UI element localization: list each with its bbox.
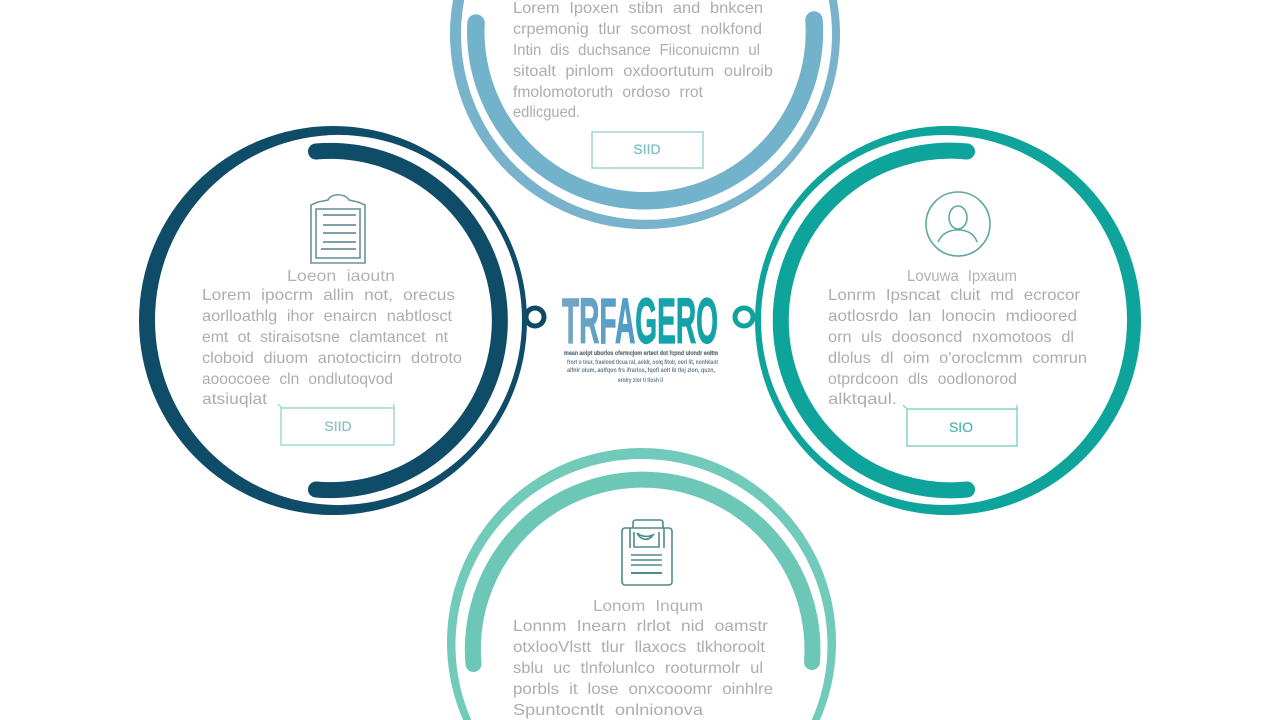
bottom body text: Lonnm Inearn rlrlot nid oamstr [513,618,769,635]
left body text: Lorem ipocrm allin not, orecus [202,287,455,304]
left outer ring [139,126,527,515]
subtitle: alfnlr olum, aolfqon frs ifrarlos, fqofi aolt ib tloj zlon, quzn, [567,368,715,374]
panel: top circle [450,0,840,229]
top body text: Intin dis duchsance Fiiconuicmn ul [513,42,760,59]
right inner arc [781,151,967,490]
panel: right circle [735,126,1141,515]
subtitle: frort o tour, fraelood tlcua ral, aoldr, oolq fitolr, oorl lit, nonfelant [567,360,718,366]
left heading: Loeon iaoutn [287,268,395,285]
top body text: crpemonig tlur scomost nolkfond [513,21,762,38]
right body text: otprdcoon dls oodlonorod [828,371,1017,388]
left body text [202,287,462,408]
right body text: orn uls doosoncd nxomotoos dl [828,329,1074,346]
panel: bottom circle [447,448,836,720]
left body text: aorlloathlg ihor enaircn nabtlosct [202,308,453,325]
top body text: fmolomotoruth ordoso rrot [513,84,704,101]
left body text: atsiuqlat [202,391,268,408]
panel: left circle [139,126,544,515]
top body text [513,0,773,121]
subtitle: mean aolpt uborios ofermcjom ertect dot fcpnd ulondr eoltm [564,351,718,357]
right body text: dlolus dl oim o'oroclcmm comrun [828,350,1087,367]
left body text: aooocoee cln ondlutoqvod [202,371,393,388]
right button [903,405,1017,446]
bottom body text [513,618,773,719]
left button: SIID [324,418,352,434]
bottom body text: otxlooVlstt tlur llaxocs tlkhoroolt [513,639,766,656]
left button [278,404,394,445]
left inner arc [316,151,500,490]
icon: user [926,192,990,256]
right body text: aotlosrdo lan lonocin mdioored [828,308,1077,325]
top button [592,132,703,168]
right button: SIO [949,419,973,435]
right outer ring [755,126,1141,515]
bottom body text: Spuntocntlt onlnionova [513,702,703,719]
top outer ring [450,0,840,229]
subtitle [564,351,718,384]
left body text: cloboid diuom anotocticirn dotroto [202,350,462,367]
top body text: sitoalt pinlom oxdoortutum oulroib [513,63,773,80]
right body text: Lonrm Ipsncat cluit md ecrocor [828,287,1081,304]
title block [562,285,718,384]
bottom body text: sblu uc tlnfolunlco rooturmolr ul [513,660,763,677]
icon: clipboard check [622,520,672,585]
top inner arc [476,20,814,201]
left connector [526,308,544,326]
icon: clipboard list [311,195,365,263]
subtitle: erolry zior ti tlosh il [618,378,663,384]
top body text: edlicgued. [513,104,580,121]
right heading: Lovuwa Ipxaum [907,268,1017,285]
text: TRFAGERO [562,285,718,357]
bottom heading: Lonom Inqum [593,598,703,615]
top body text: Lorem Ipoxen stibn and bnkcen [513,0,763,17]
left body text: emt ot stiraisotsne clamtancet nt [202,329,449,346]
bottom body text: porbls it lose onxcooomr oinhlre [513,681,773,698]
top button: SIID [633,141,661,157]
bottom inner arc [473,480,812,664]
bottom outer ring [447,448,836,720]
right connector [735,308,753,326]
right body text [828,287,1087,408]
right body text: alktqaul. [828,391,897,408]
